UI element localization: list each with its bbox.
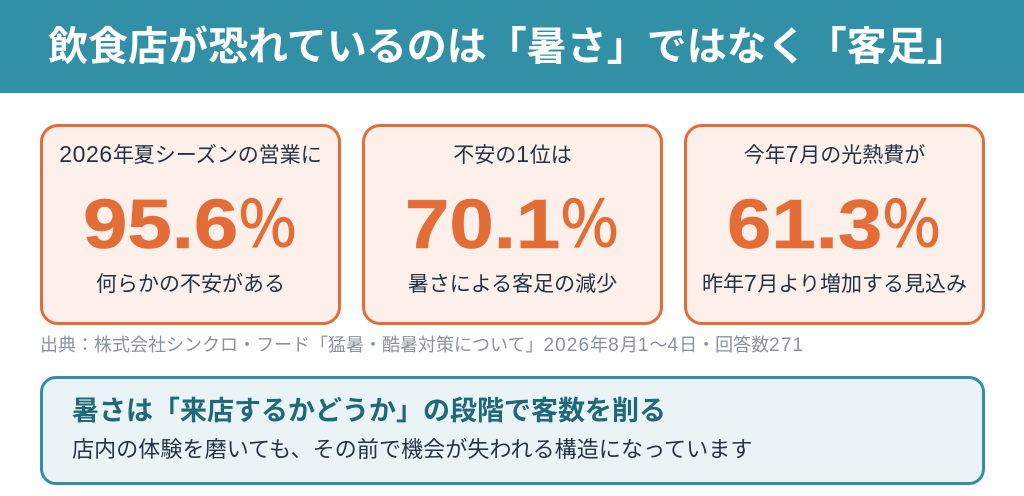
- panel: 95.6% stat: 2026年夏シーズンの営業に: [59, 141, 322, 167]
- panel: 61.3% stat: [684, 124, 985, 325]
- stat number: [727, 172, 940, 265]
- panel: takeaway: [40, 376, 985, 485]
- stat number: [405, 172, 618, 265]
- stat number: 95.6: [83, 185, 238, 263]
- stat number: 70.1: [405, 185, 560, 263]
- panel: 70.1% stat: 不安の1位は: [453, 141, 572, 167]
- panel: 70.1% stat: 暑さによる客足の減少: [408, 273, 617, 296]
- panel: 61.3% stat: 昨年7月より増加する見込み: [702, 270, 967, 296]
- takeaway heading: 暑さは「来店するかどうか」の段階で客数を削る: [72, 396, 666, 426]
- stat number: [83, 172, 296, 265]
- stat number: %: [883, 172, 940, 265]
- panel: 95.6% stat: 何らかの不安がある: [96, 273, 285, 296]
- panel: 61.3% stat: 今年7月の光熱費が: [744, 141, 925, 167]
- stat number: 61.3: [727, 185, 882, 263]
- panel: 95.6% stat: [40, 124, 341, 325]
- source note: 出典：株式会社シンクロ・フード「猛暑・酷暑対策について」2026年8月1〜4日・回答数271: [40, 335, 804, 356]
- stat number: %: [239, 172, 296, 265]
- takeaway body: 店内の体験を磨いても、その前で機会が失われる構造になっています: [72, 437, 752, 462]
- header banner: [0, 0, 1024, 93]
- stat number: %: [561, 172, 618, 265]
- title: 飲食店が恐れているのは「暑さ」ではなく「客足」: [48, 25, 967, 69]
- panel: 70.1% stat: [362, 124, 663, 325]
